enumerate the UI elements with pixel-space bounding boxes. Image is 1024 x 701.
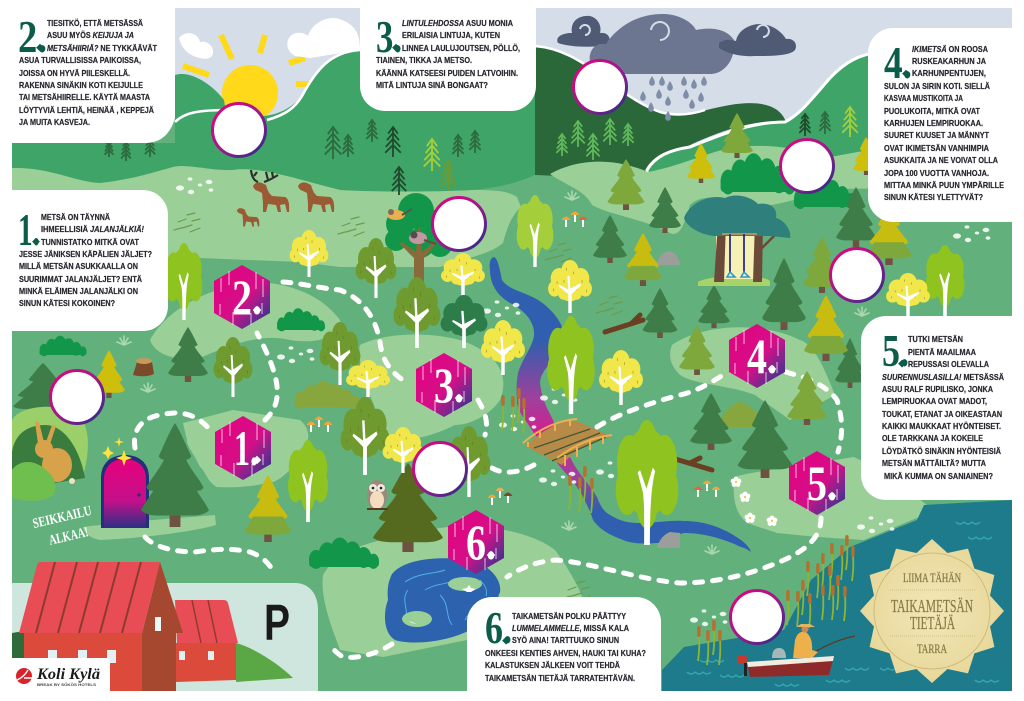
panel: step 2 fairies: 2.: [18, 12, 47, 62]
panel: step 5 magnifying glass: LÖYDÄTKÖ SINÄKIN HYÖNTEISIÄ: [882, 446, 1001, 456]
sticker badge: TIETÄJÄ: [910, 613, 955, 633]
hexagon marker 3: [416, 353, 472, 417]
panel: step 1 footprints: [0, 190, 168, 331]
birch trees: [166, 195, 964, 545]
meadow patches: [83, 282, 927, 657]
panel: step 1 footprints: SUURIMMAT JALANJÄLJET? ENTÄ: [19, 274, 142, 284]
adventure path dashes: [134, 282, 842, 657]
panel: step 4 old forest: SINUN KÄTESI YLETTYVÄT?: [884, 192, 983, 202]
adventure label: ALKAA!: [48, 525, 90, 549]
green bushes: [40, 153, 856, 569]
panel: step 6 pond: KALASTUKSEN JÄLKEEN VOIT TEHDÄ: [485, 660, 620, 670]
yellow round trees: [290, 230, 930, 473]
panel: step 5 magnifying glass: KAIKKI MAUKKAAT HYÖNTEISET.: [882, 421, 1001, 431]
panel: step 4 old forest: JOPA 100 VUOTTA VANHOJA.: [884, 168, 989, 178]
hexagon marker 2: [214, 265, 270, 329]
pond: [385, 558, 500, 643]
panel: step 4 old forest: 4.: [884, 38, 912, 88]
olive round trees: [214, 238, 490, 497]
panel: step 5 magnifying glass: SUURENNUSLASILLA! METSÄSSÄ: [882, 372, 1004, 382]
swing: [722, 234, 757, 277]
water ripples: [687, 522, 999, 686]
panel: step 1 footprints: JESSE JÄNIKSEN KÄPÄLIEN JÄLJET?: [19, 249, 152, 259]
panel: step 1 footprints: SINUN KÄTESI KOKOINEN?: [19, 298, 115, 308]
panel: step 5 magnifying glass: METSÄN MÄTTÄILTÄ? MUTTA: [882, 458, 986, 468]
fir trees dark: [13, 187, 876, 478]
panel: step 2 fairies: [0, 0, 175, 143]
panel: step 1 footprints: MINKÄ ELÄIMEN JALANJÄLKI ON: [19, 286, 138, 296]
olive bushes: [294, 381, 762, 429]
panel: step 2 fairies: ASUU MYÖS KEIJUJA JA: [47, 30, 134, 40]
logs: [605, 315, 712, 470]
sticker badge: [860, 539, 1004, 683]
hexagon marker 6: [448, 510, 504, 574]
panel: step 6 pond: 6.: [485, 603, 512, 653]
sticker badge: LIIMA TÄHÄN: [903, 570, 961, 585]
small barn: [175, 600, 238, 682]
magic door: [101, 437, 149, 528]
hexagon marker 1: 1.: [234, 420, 258, 476]
panel: step 3 birds: [360, 0, 536, 111]
moose family: [237, 170, 334, 226]
panel: step 6 pond: LUMMELAMMELLE, MISSÄ KALA: [512, 623, 629, 633]
panel: step 6 pond: SYÖ AINA! TARTTUUKO SINUN: [512, 635, 619, 645]
rocks: [657, 251, 680, 548]
panel: step 5 magnifying glass: REPUSSASI OLEVALLA: [908, 359, 989, 369]
bridge: [523, 419, 612, 466]
panel: step 5 magnifying glass: TOUKAT, ETANAT JA OIKEASTAAN: [882, 409, 1002, 419]
panel: step 4 old forest: OVAT IKIMETSÄN VANHIMPIA: [884, 143, 989, 153]
panel: step 5 magnifying glass: MIKÄ KUMMA ON SANIAINEN?: [884, 471, 993, 481]
panel: step 5 magnifying glass: PIENTÄ MAAILMAA: [908, 347, 976, 357]
panel: step 3 birds: 3.: [376, 12, 402, 62]
white flowers: [731, 477, 777, 526]
panel: step 6 pond: TAIKAMETSÄN TIETÄJÄ TARRATEHTÄVÄN.: [485, 673, 635, 683]
panel: step 4 old forest: MITTAA MINKÄ PUUN YMPÄRILLE: [884, 180, 1004, 190]
sticker badge: TARRA: [917, 641, 947, 656]
panel: step 1 footprints: IHMEELLISIÄ JALANJÄLKIÄ!: [41, 224, 144, 234]
panel: step 3 birds: LINTULEHDOSSA ASUU MONIA: [402, 18, 513, 28]
panel: step 2 fairies: JOISSA ON HYVÄ PIILESKELLÄ.: [19, 68, 130, 78]
storm clouds and rain: [557, 14, 796, 121]
panel: step 4 old forest: SULON JA SIRIN KOTI. SIELLÄ: [884, 81, 990, 91]
panel: step 5 magnifying glass: OLE TARKKANA JA KOKEILE: [882, 433, 983, 443]
panel: step 3 birds: TIAINEN, TIKKA JA METSO.: [376, 55, 472, 65]
fir trees yellow: [93, 137, 912, 542]
panel: step 2 fairies: TAI METSÄHIIRELLE. KÄYTÄ MAASTA: [19, 92, 150, 102]
cattails: [501, 388, 855, 665]
panel: step 4 old forest: SUURET KUUSET JA MÄNNYT: [884, 130, 989, 140]
fir trees olive: [608, 113, 841, 425]
panel: step 1 footprints: MILLÄ METSÄN ASUKKAALLA ON: [19, 261, 138, 271]
big fir by the door: [141, 423, 209, 527]
sun with rays: [183, 35, 309, 121]
logo: Koli Kylä: Koli Kylä: [36, 666, 100, 683]
hexagon marker 5: [789, 451, 845, 515]
light meadow upper left: [12, 166, 521, 267]
hexagon marker 2: 2.: [232, 269, 262, 325]
panel: step 4 old forest: KARHUJEN LEMPIRUOKAA.: [884, 118, 983, 128]
panel: step 4 old forest: KASVAA MUSTIKOITA JA: [884, 93, 963, 103]
panel: step 2 fairies: LÖYTYVIÄ LEHTIÄ, HEINÄÄ , KEPPEJÄ: [19, 105, 154, 115]
panel: step 1 footprints: METSÄ ON TÄYNNÄ: [41, 212, 110, 222]
adventure label: [31, 504, 98, 551]
panel: step 1 footprints: 1.: [18, 205, 40, 255]
rabbit in bushes: [12, 407, 88, 501]
deer: [298, 182, 334, 212]
tree stump: [133, 358, 154, 376]
panel: step 2 fairies: ASUA TURVALLISISSA PAIKOISSA,: [19, 55, 141, 65]
bird: tit: [387, 209, 412, 220]
left big hill with white edge: [12, 47, 535, 192]
parking area: [12, 583, 318, 691]
hexagon marker 4: [729, 324, 785, 388]
fisherman in boat: [737, 624, 855, 677]
barn: [12, 562, 293, 691]
stepping stones: [176, 177, 990, 626]
lake water: [662, 500, 1012, 691]
panel: step 5 magnifying glass: LEMPIRUOKAA OVAT MADOT,: [882, 396, 987, 406]
hexagon marker 3: 3.: [434, 357, 464, 413]
hexagon marker 1: [215, 416, 271, 480]
panel: step 5 magnifying glass: [861, 316, 1024, 500]
dark olive fir: [373, 463, 443, 552]
panel: step 2 fairies: TIESITKÖ, ETTÄ METSÄSSÄ: [47, 18, 143, 28]
panel: step 4 old forest: [868, 28, 1024, 222]
panel: step 4 old forest: IKIMETSÄ ON ROOSA: [912, 44, 988, 54]
panel: step 3 birds: KÄÄNNÄ KATSEESI PUIDEN LATVOIHIN.: [376, 68, 518, 78]
hexagon marker 4: 4.: [747, 328, 777, 384]
panel: step 2 fairies: JA MUITA KASVEJA.: [19, 117, 90, 127]
sticker badge: TAIKAMETSÄN: [891, 596, 973, 616]
big bird tree: [385, 193, 452, 290]
panel: step 4 old forest: RUSKEAKARHUN JA: [912, 56, 986, 66]
stamp circles: [50, 60, 884, 644]
mushrooms: [306, 212, 720, 505]
swing between teal trees: [684, 196, 790, 286]
hexagon marker 6: 6.: [466, 514, 496, 570]
owl: [367, 480, 388, 510]
panel: step 6 pond: ONKEESI KENTIES AHVEN, HAUKI TAI KUHA?: [485, 648, 646, 658]
panel: step 2 fairies: RAKENNA SINÄKIN KOTI KEIJULLE: [19, 80, 143, 90]
parking sign P: P: [264, 594, 290, 651]
river: [490, 257, 751, 552]
right hill with white edge: [647, 52, 1012, 300]
white clouds: [179, 18, 360, 59]
panel: step 4 old forest: KARHUNPENTUJEN,: [912, 68, 986, 78]
panel: step 5 magnifying glass: ASUU RALF RUPILISKO, JONKA: [882, 384, 993, 394]
panel: step 1 footprints: TUNNISTATKO MITKÄ OVAT: [41, 237, 139, 247]
panel: step 6 pond: TAIKAMETSÄN POLKU PÄÄTTYY: [512, 611, 626, 621]
fawn: [237, 208, 259, 226]
small conifers on hills: [105, 107, 858, 195]
grass marks and tufts: [117, 191, 869, 600]
left small hill: [175, 74, 232, 150]
rabbit: [35, 422, 75, 484]
panel: step 5 magnifying glass: TUTKI METSÄN: [908, 334, 963, 344]
panel: step 4 old forest: PUOLUKOITA, MITKÄ OVAT: [884, 106, 980, 116]
panel: step 3 birds: ERILAISIA LINTUJA, KUTEN: [402, 30, 500, 40]
hexagon marker 5: 5.: [807, 455, 837, 511]
light meadow upper right: [550, 146, 880, 234]
bird: bullfinch: [409, 232, 436, 244]
panel: step 3 birds: MITÄ LINTUJA SINÄ BONGAAT?: [376, 80, 488, 90]
adventure label: SEIKKAILU: [31, 504, 93, 532]
main barn: [19, 562, 183, 691]
panel: step 5 magnifying glass: 5.: [882, 326, 909, 376]
main green below right hill: [560, 176, 1012, 316]
panel: step 6 pond: [467, 597, 661, 701]
dark hill: [535, 46, 786, 176]
panel: step 4 old forest: ASUKKAITA JA NE VOIVAT OLLA: [884, 155, 998, 165]
panel: step 2 fairies: METSÄHIIRIÄ? NE TYKKÄÄVÄT: [47, 43, 157, 53]
logo: Koli Kylä: [0, 658, 110, 701]
sky: [175, 8, 1012, 168]
sparkle stars: [102, 437, 132, 466]
logo: Koli Kylä: BREAK BY SÖKÖS HOTELS: [37, 682, 97, 687]
panel: step 3 birds: LINNEA LAULUJOUTSEN, PÖLLÖ,: [402, 43, 520, 53]
moose: [251, 170, 289, 212]
